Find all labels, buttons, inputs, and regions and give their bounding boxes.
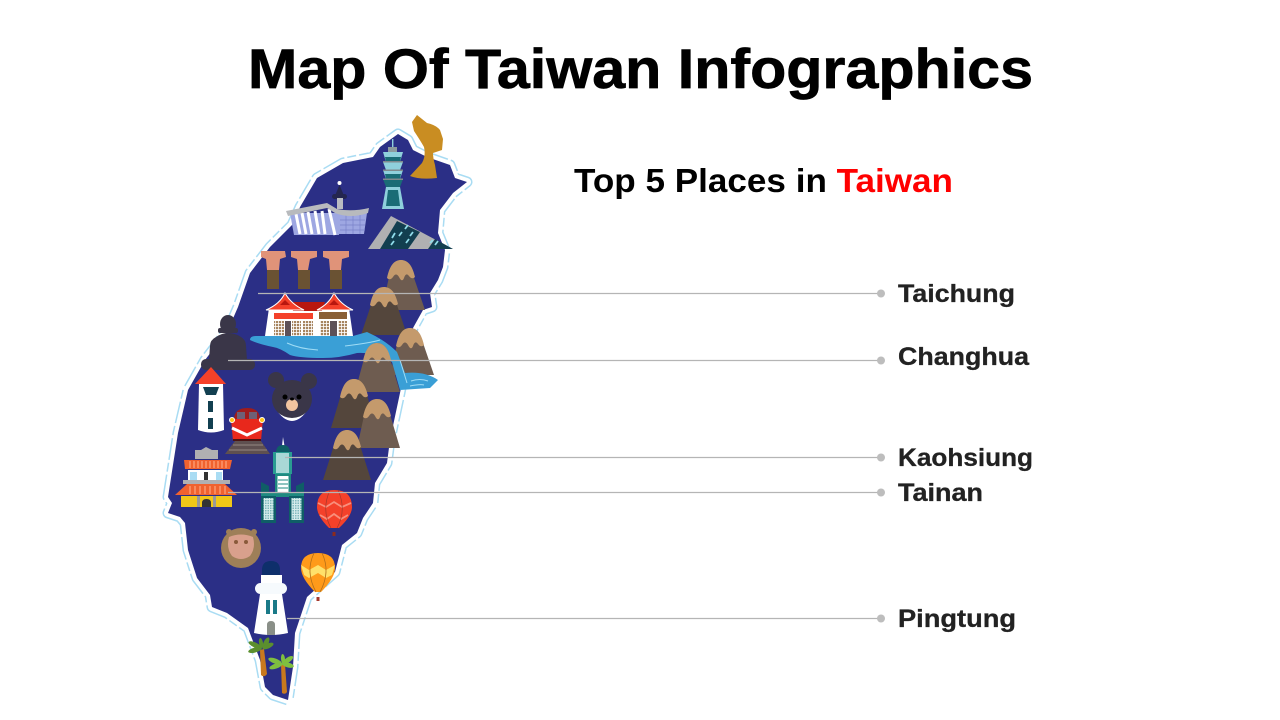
icon: memorial hall xyxy=(265,293,353,336)
map of Taiwan xyxy=(168,134,467,700)
leader line: Kaohsiung xyxy=(285,454,885,462)
icon: mountain centre xyxy=(355,343,400,392)
icon: Tuntex Sky Tower xyxy=(261,437,304,523)
icon: Formosan macaque xyxy=(221,528,261,568)
icon: mountain back xyxy=(382,260,425,310)
icon: stadium xyxy=(368,216,453,249)
icon: Taiwanese temple xyxy=(175,447,237,507)
label: Taichung: Taichung xyxy=(898,280,1015,308)
label: Kaohsiung: Kaohsiung xyxy=(898,444,1033,472)
icon: white lighthouse xyxy=(254,561,288,635)
icon: airport terminal xyxy=(286,181,369,235)
leader line: Changhua xyxy=(228,356,885,364)
icon: red hot-air balloon xyxy=(317,490,352,536)
label: Tainan: Tainan xyxy=(898,479,983,507)
icon: river and waterfall xyxy=(250,332,438,390)
icon: Taipei 101 tower xyxy=(382,139,404,209)
icon: mountain west xyxy=(331,379,376,428)
icon: mountain south xyxy=(323,430,371,480)
icon: palm tree right xyxy=(268,654,294,694)
icon: railway tracks xyxy=(225,441,270,454)
icon: Formosan black bear xyxy=(268,372,317,421)
label: Pingtung: Pingtung xyxy=(898,605,1016,633)
icon: supertrees xyxy=(261,251,349,289)
label: Changhua: Changhua xyxy=(898,343,1030,371)
icon: mountain dark north xyxy=(361,287,407,335)
title: Map Of Taiwan Infographics xyxy=(248,37,1033,100)
leader line: Tainan xyxy=(228,488,885,496)
icon: orange hot-air balloon xyxy=(301,553,335,601)
subtitle: Top 5 Places in Taiwan xyxy=(574,162,953,199)
icon: golden statue xyxy=(410,115,443,179)
icon: forest train xyxy=(230,408,264,441)
leader line: Pingtung xyxy=(287,614,885,622)
icon: Buddha statue xyxy=(201,315,255,370)
icon: red-roof lighthouse xyxy=(195,367,226,432)
leader line: Taichung xyxy=(258,290,885,298)
icon: mountain south east xyxy=(357,399,400,448)
icon: mountain east xyxy=(390,328,434,375)
icon: palm tree left xyxy=(248,637,274,676)
